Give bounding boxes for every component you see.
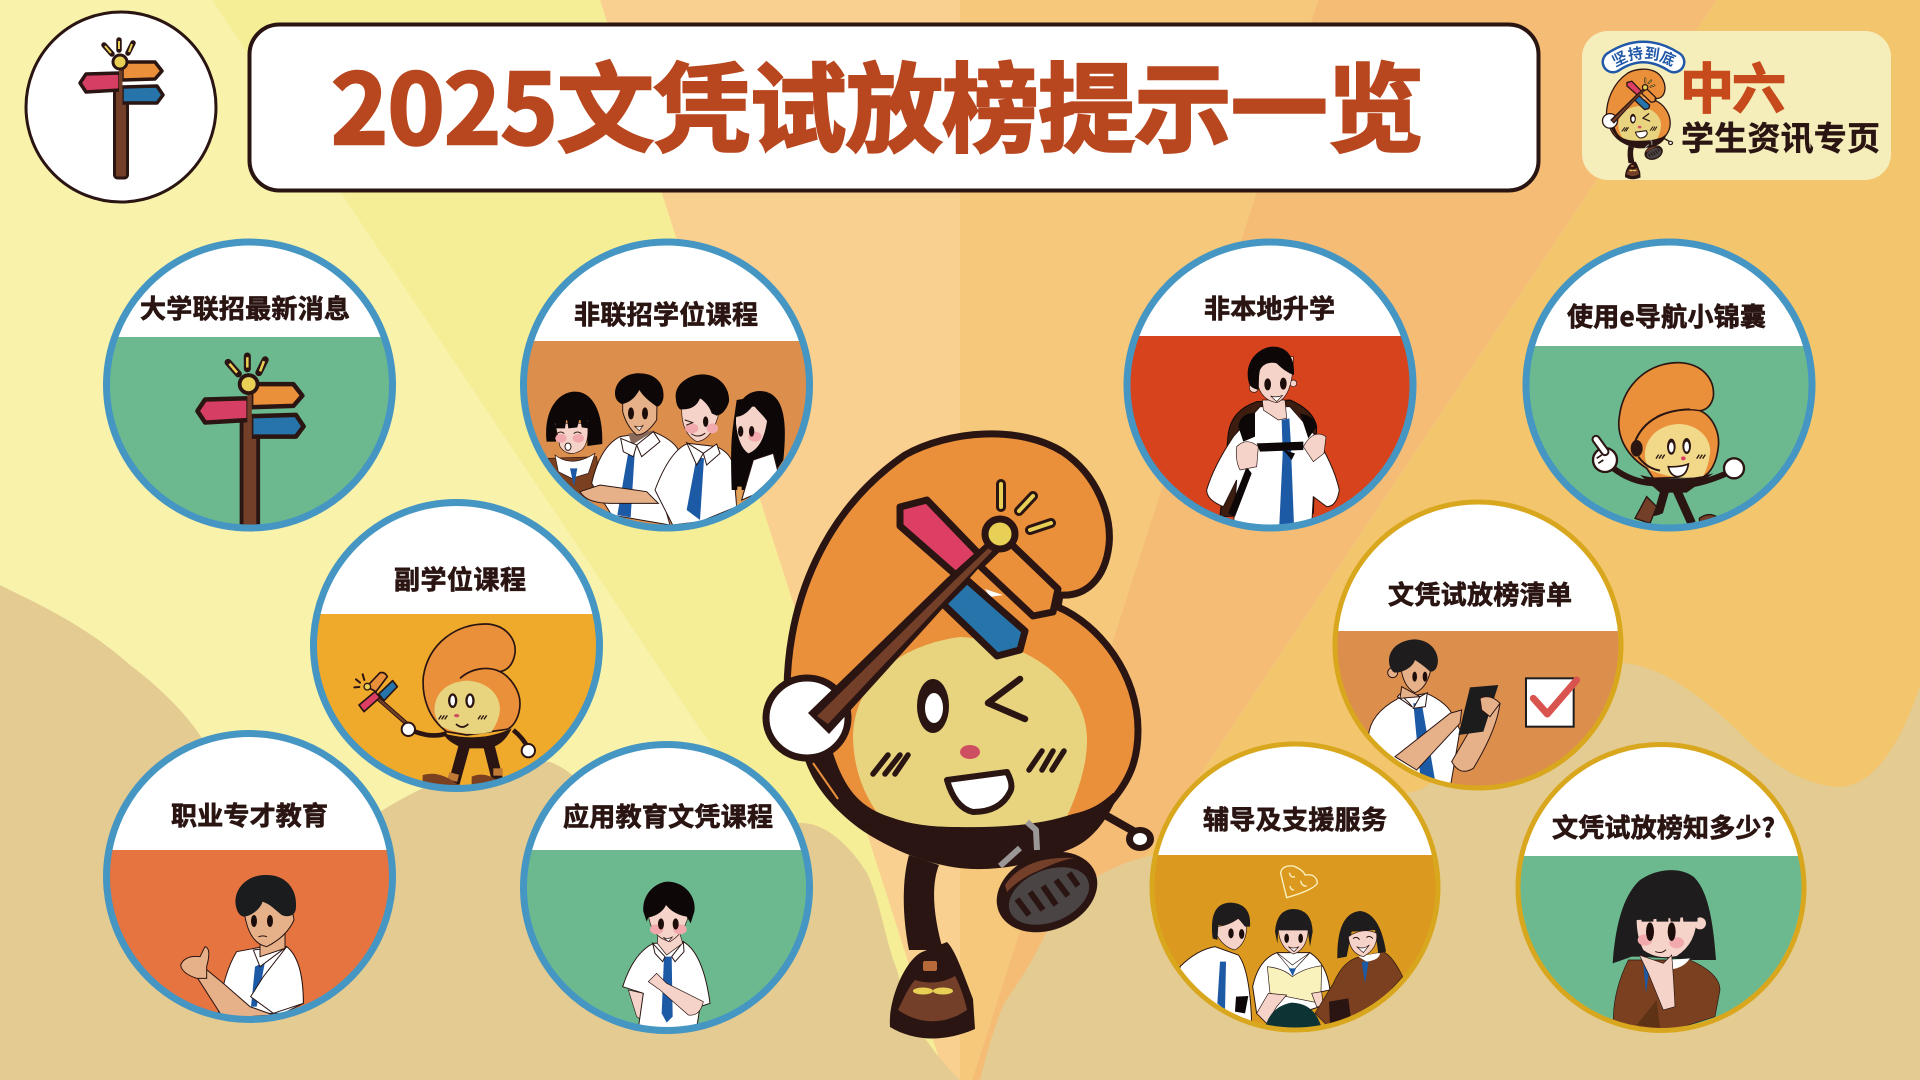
title text: 2025文凭试放榜提示一览 bbox=[331, 31, 1424, 172]
left hand bbox=[766, 678, 848, 758]
heading: 副学位课程 bbox=[394, 560, 526, 597]
logo name: 中六 bbox=[1680, 45, 1786, 124]
panel: 副学位课程 bbox=[305, 502, 605, 814]
panel: 应用教育文凭课程 bbox=[515, 744, 815, 1040]
illustration: mascot with headset bbox=[1593, 363, 1744, 525]
standing leg bbox=[904, 855, 943, 950]
heading: 使用e导航小锦囊 bbox=[1567, 297, 1766, 334]
heading: 非联招学位课程 bbox=[574, 295, 758, 332]
central mascot bbox=[766, 434, 1154, 1039]
face bbox=[853, 637, 1087, 832]
publisher logo box bbox=[1582, 31, 1891, 180]
heading: 职业专才教育 bbox=[171, 796, 328, 833]
mini mascot bbox=[1603, 69, 1673, 179]
face features bbox=[873, 679, 1064, 812]
illustration: student thumbs up bbox=[181, 875, 303, 1018]
panel: 非本地升学 bbox=[1118, 242, 1418, 536]
panel: 文凭试放榜清单 bbox=[1328, 502, 1628, 801]
heading: 文凭试放榜知多少? bbox=[1552, 808, 1775, 845]
illustration: girl thinking bbox=[1613, 870, 1720, 1030]
logo circle with signpost bbox=[26, 12, 216, 202]
illustration: mascot holding signpost bbox=[354, 624, 535, 785]
heading: 大学联招最新消息 bbox=[140, 289, 350, 326]
heading: 非本地升学 bbox=[1204, 289, 1335, 326]
illustration: student with backpack bbox=[1207, 347, 1339, 527]
illustration: student with hand on chest bbox=[623, 882, 710, 1028]
icon: heart bbox=[1281, 866, 1317, 898]
body and arm bbox=[805, 753, 1118, 869]
light rays bbox=[1001, 484, 1051, 530]
panel: 文凭试放榜知多少? bbox=[1510, 744, 1810, 1041]
logo subtitle: 学生资讯专页 bbox=[1681, 112, 1880, 160]
kicking shoe bbox=[985, 822, 1109, 947]
standing shoe bbox=[890, 942, 975, 1039]
heading: 辅导及支援服务 bbox=[1203, 800, 1387, 837]
panel: 大学联招最新消息 bbox=[100, 242, 400, 537]
signpost arrows bbox=[808, 500, 1058, 734]
panel: 辅导及支援服务 bbox=[1145, 744, 1445, 1040]
badge: 坚持到底: 坚持到底 bbox=[1611, 46, 1676, 68]
icon: signpost illustration bbox=[197, 356, 304, 533]
illustration: four students bbox=[546, 373, 785, 525]
right arm bbox=[1105, 815, 1135, 832]
icon: signpost bbox=[80, 40, 163, 178]
title banner bbox=[250, 24, 1538, 190]
head bbox=[787, 434, 1138, 845]
panel: 非联招学位课程 bbox=[515, 242, 815, 541]
illustration: student with tablet bbox=[1368, 639, 1577, 785]
heading: 应用教育文凭课程 bbox=[563, 797, 773, 834]
panel: 使用e导航小锦囊 bbox=[1518, 242, 1818, 536]
panel: 职业专才教育 bbox=[100, 734, 400, 1030]
illustration: three students reading bbox=[1180, 866, 1403, 1028]
heading: 文凭试放榜清单 bbox=[1388, 575, 1572, 612]
